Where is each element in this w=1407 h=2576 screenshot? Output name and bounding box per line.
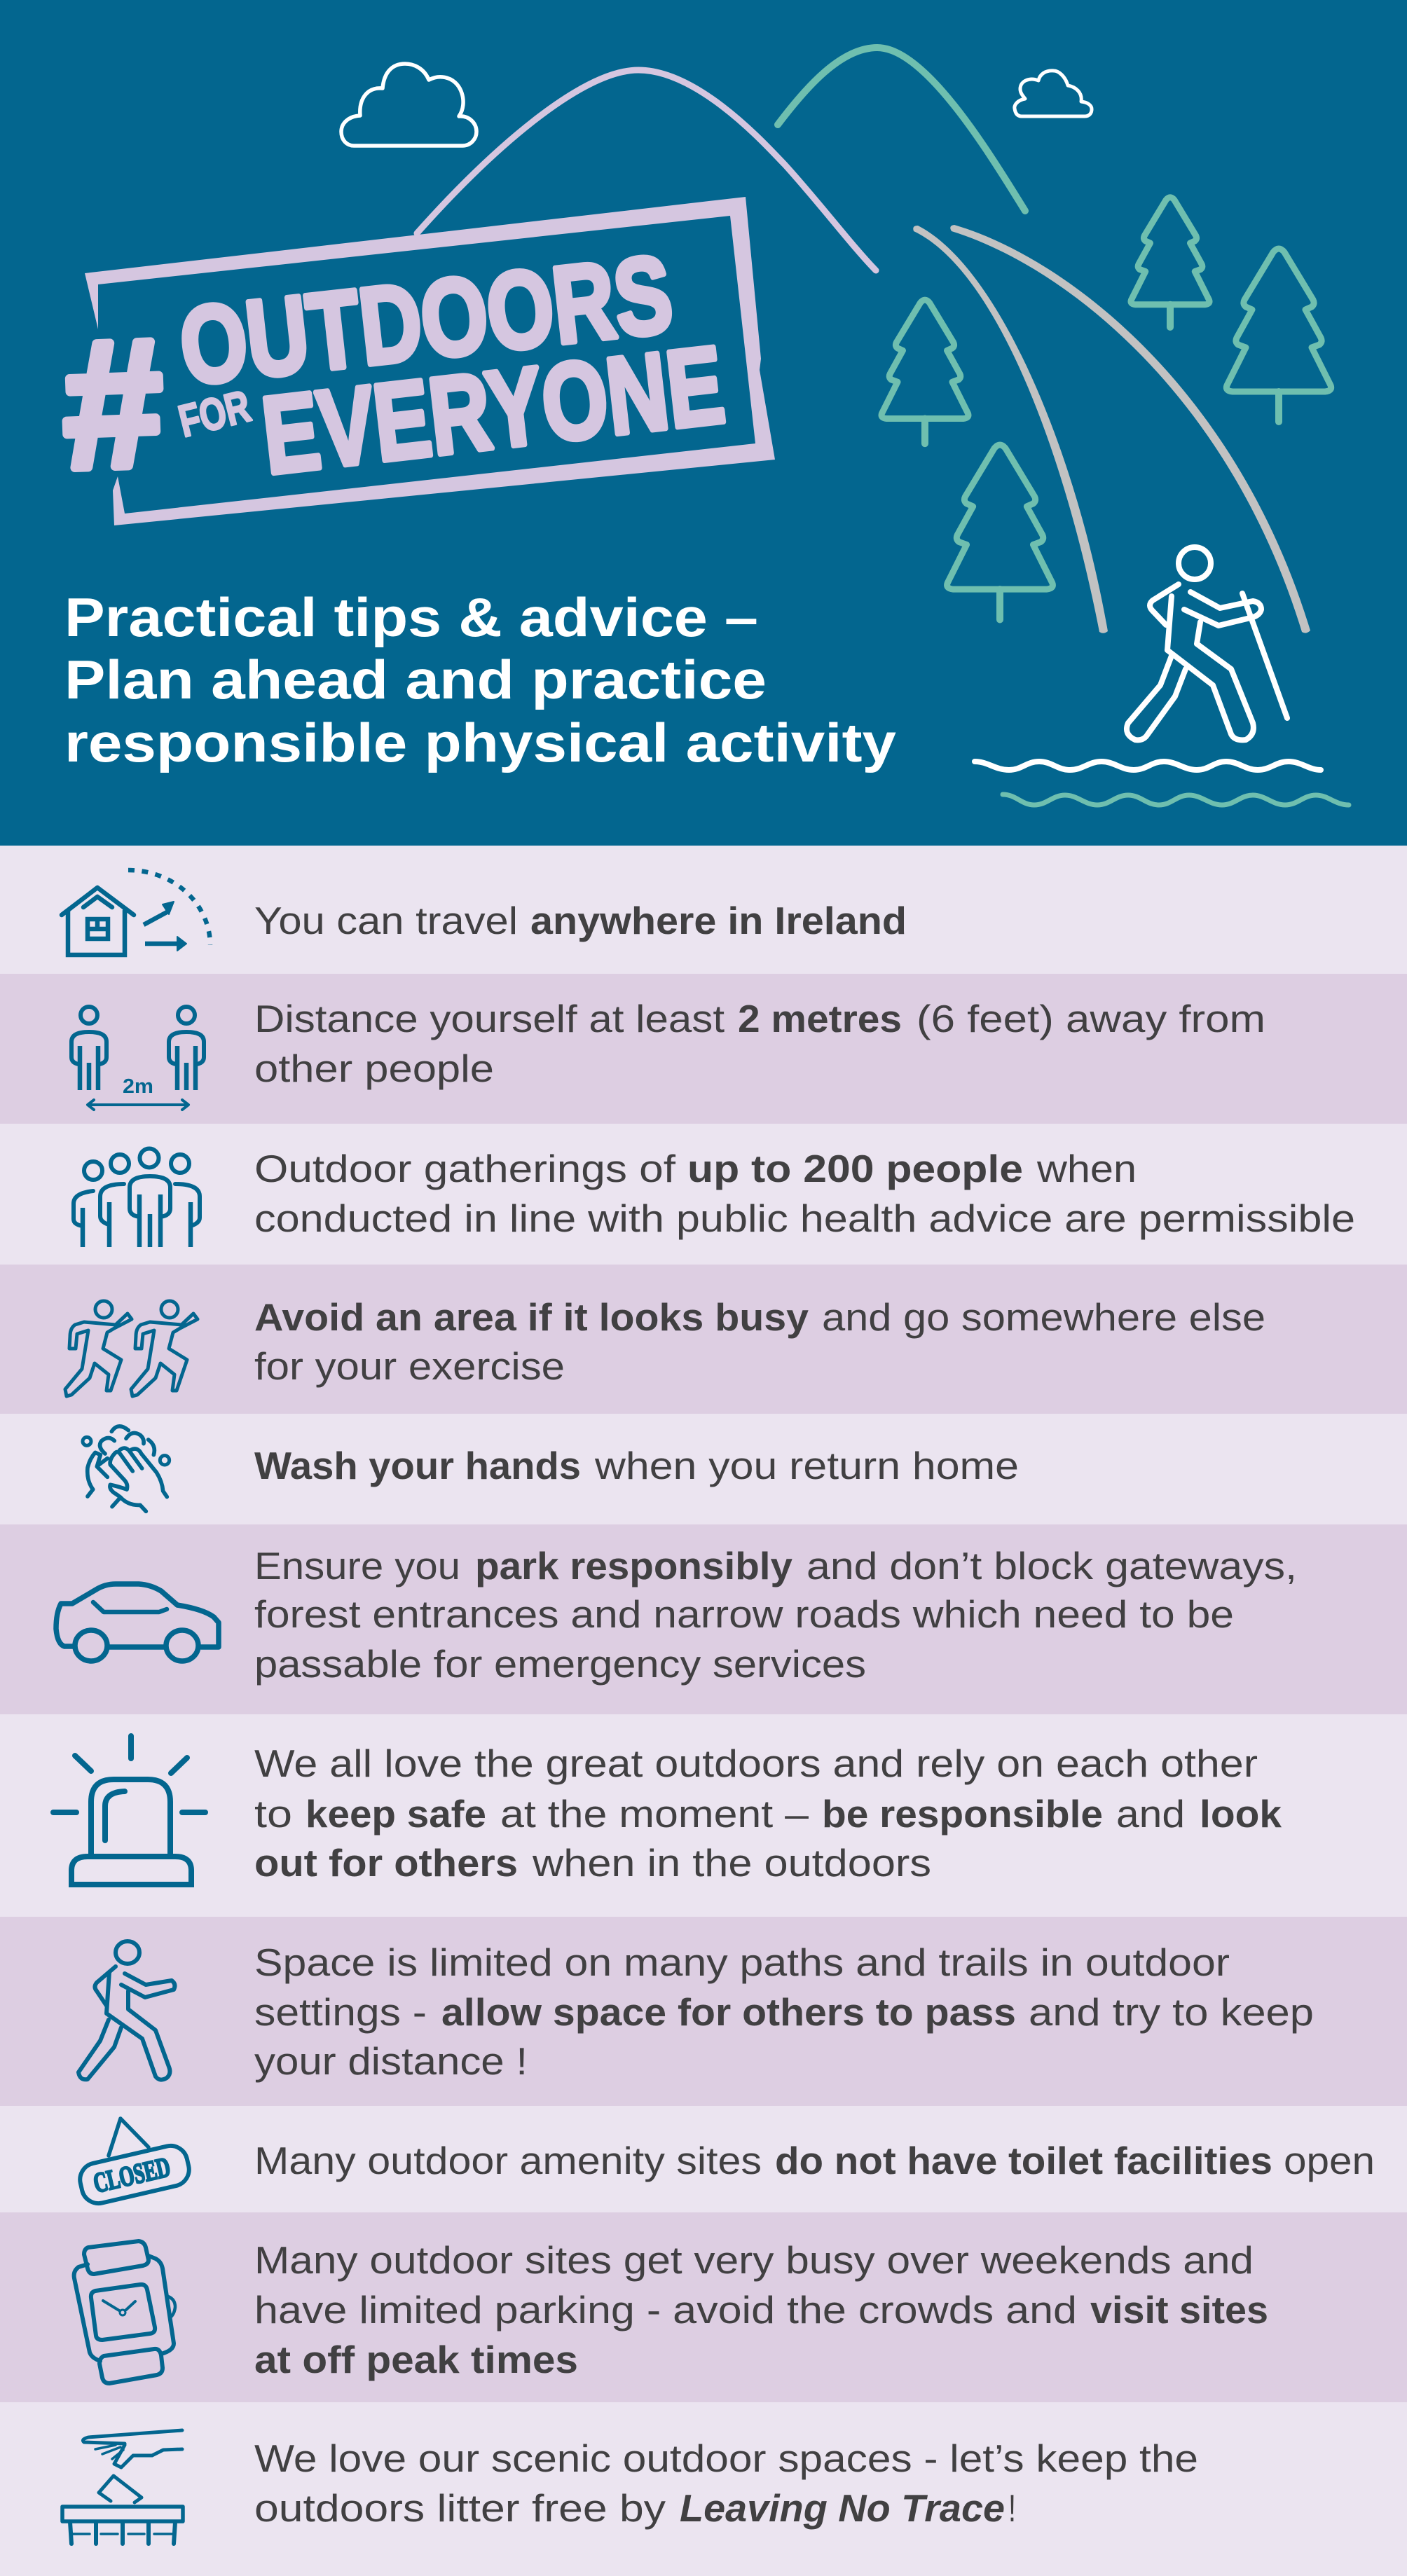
row 8 background (0, 1917, 1407, 2106)
text: row 6: passable for emergency services (254, 1642, 866, 1686)
text: row 7: and (1116, 1792, 1185, 1835)
text: row 10: have limited parking - avoid the crowds and (254, 2288, 1077, 2332)
text: row 7: at the moment – (500, 1792, 809, 1835)
text: row 4: Avoid an area if it looks busy (254, 1295, 809, 1339)
text: row 7: when in the outdoors (532, 1841, 931, 1885)
row 4 background (0, 1265, 1407, 1414)
text: row 2: (6 feet) away from (917, 997, 1265, 1040)
row 5 background (0, 1414, 1407, 1524)
icon: two people 2m apart: 2m (123, 1075, 153, 1098)
row 2 background (0, 974, 1407, 1124)
heading (64, 586, 896, 773)
heading: responsible physical activity (64, 712, 896, 773)
row 3 background (0, 1124, 1407, 1265)
text: row 8: and try to keep (1029, 1990, 1314, 2034)
text: row 11: We love our scenic outdoor spaces - let’s keep the (254, 2437, 1198, 2480)
text: row 2: 2 metres (738, 997, 902, 1040)
icon: walking person (78, 1941, 174, 2080)
grey trail left (913, 226, 1108, 633)
text: row 3: when (1036, 1147, 1137, 1190)
text: row 1: You can travel (254, 899, 518, 942)
text: row 6: and don’t block gateways, (807, 1544, 1297, 1587)
heading: Practical tips & advice – (64, 586, 758, 648)
text: row 8: settings - (254, 1990, 427, 2034)
icon: tree 4 (1226, 249, 1331, 422)
icon: tree 3 (1131, 198, 1209, 327)
text: row 10 (254, 2238, 1268, 2381)
text: row 3: Outdoor gatherings of (254, 1147, 676, 1190)
heading: Plan ahead and practice (64, 649, 767, 710)
text: row 11: outdoors litter free by (254, 2486, 666, 2530)
row 10 background (0, 2212, 1407, 2402)
icon: small cloud (1015, 71, 1092, 116)
text: row 4: and go somewhere else (822, 1295, 1265, 1339)
text: row 9: do not have toilet facilities (775, 2139, 1272, 2182)
text: row 7 (254, 1742, 1282, 1885)
icon: tree 1 (881, 300, 968, 443)
text: row 10: visit sites (1090, 2288, 1268, 2332)
text: row 6: Ensure you (254, 1544, 460, 1587)
text: row 9: Many outdoor amenity sites (254, 2139, 762, 2182)
icon: large cloud (341, 64, 476, 146)
icon: group of people (74, 1149, 200, 1247)
icon: closed sign (76, 2119, 193, 2207)
row 9 background (0, 2106, 1407, 2212)
logo: hash mark: # (60, 301, 166, 507)
text: row 6: forest entrances and narrow roads which need to be (254, 1592, 1234, 1636)
text: row 3: up to 200 people (687, 1147, 1023, 1190)
text: row 11 (254, 2437, 1198, 2530)
text: row 8: your distance ! (254, 2039, 528, 2083)
text: row 7: to (254, 1792, 292, 1835)
teal mountain line (778, 48, 1025, 211)
icon: house with arrows (62, 870, 210, 955)
icon: tree 2 (947, 445, 1052, 620)
icon: two people 2m apart (71, 1007, 204, 1110)
icon: hiker (1127, 547, 1287, 740)
text: row 7: look (1200, 1792, 1282, 1835)
text: row 8: Space is limited on many paths and trails in outdoor (254, 1941, 1230, 1984)
text: row 10: at off peak times (254, 2338, 578, 2381)
text: row 4 (254, 1295, 1265, 1388)
text: row 7: keep safe (306, 1792, 486, 1835)
text: row 6: park responsibly (475, 1544, 792, 1587)
text: row 5: Wash your hands (254, 1444, 581, 1487)
text: row 7: We all love the great outdoors and rely on each other (254, 1742, 1258, 1785)
lilac mountain line (417, 70, 876, 270)
text: row 2: other people (254, 1047, 494, 1090)
icon: wristwatch (74, 2241, 175, 2383)
row 6 background (0, 1524, 1407, 1714)
icon: closed sign: CLOSED (90, 2151, 173, 2199)
logo: OUTDOORS: OUTDOORS (174, 233, 678, 408)
white wave (975, 762, 1321, 770)
row 11 background (0, 2402, 1407, 2576)
text: row 8 (254, 1941, 1314, 2083)
icon: car (56, 1584, 219, 1661)
icon: hand dropping litter over a table (62, 2430, 183, 2544)
icon: two runners (65, 1301, 198, 1396)
row 1 background (0, 846, 1407, 974)
logo: FOR: FOR (174, 380, 255, 447)
text: row 11: ! (1008, 2486, 1016, 2530)
text: row 8: allow space for others to pass (441, 1990, 1016, 2034)
text: row 6 (254, 1544, 1297, 1686)
text: row 1: anywhere in Ireland (530, 899, 907, 942)
row 7 background (0, 1714, 1407, 1917)
text: row 10: Many outdoor sites get very busy over weekends and (254, 2238, 1254, 2282)
logo: EVERYONE: EVERYONE (256, 324, 730, 497)
text: row 5: when you return home (594, 1444, 1019, 1487)
text: row 7: out for others (254, 1841, 518, 1885)
text: row 3 (254, 1147, 1355, 1240)
text: row 2: Distance yourself at least (254, 997, 725, 1040)
text: row 3: conducted in line with public health advice are permissible (254, 1197, 1355, 1240)
text: row 4: for your exercise (254, 1344, 565, 1388)
grey trail right (950, 225, 1310, 633)
text: row 2 (254, 997, 1265, 1090)
text: row 9: open (1284, 2139, 1375, 2182)
hashtag banner frame (85, 197, 775, 525)
icon: washing hands (83, 1426, 170, 1511)
header panel (0, 0, 1407, 846)
icon: emergency siren (53, 1736, 205, 1885)
teal wave (1003, 794, 1349, 805)
text: row 7: be responsible (822, 1792, 1103, 1835)
text: row 11: Leaving No Trace (680, 2486, 1005, 2530)
